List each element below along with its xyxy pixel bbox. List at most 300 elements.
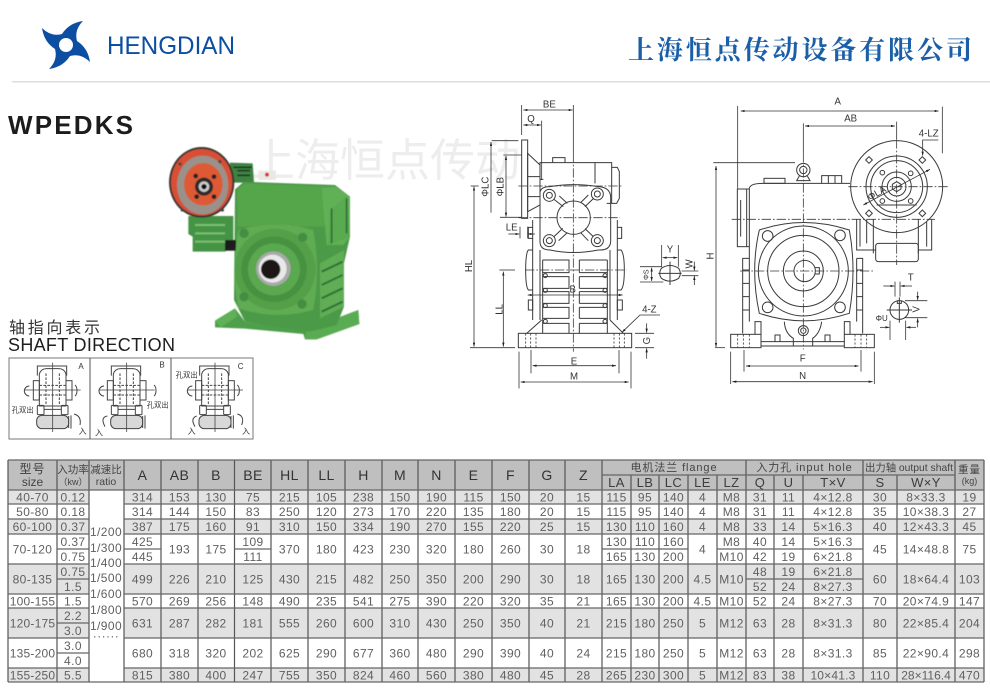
row 70-120: 14 (781, 535, 796, 549)
company name: 上海恒点传动设备有限公司 (628, 35, 972, 65)
table header row: （kw） (58, 477, 88, 487)
row 100-155: 148 (242, 594, 264, 608)
row 155-250: 815 (132, 668, 153, 682)
motor flange block (188, 216, 233, 252)
row 50-80: 11 (782, 505, 795, 519)
brand name: HENGDIAN (107, 32, 235, 60)
row 135-200: 24 (576, 646, 591, 660)
row 60-100: 25 (540, 520, 554, 534)
input shaft section: ΦU (876, 314, 888, 323)
row 120-175: 250 (663, 616, 684, 630)
row 80-135: 200 (663, 572, 684, 586)
row 70-120: 5×16.3 (813, 535, 853, 549)
row 70-120: 14×48.8 (903, 542, 949, 556)
row 100-155: 35 (540, 594, 554, 608)
shaft direction diagrams (9, 358, 253, 439)
row 80-135: 1.5 (64, 580, 82, 594)
row 80-135: 499 (132, 572, 153, 586)
specification table (8, 460, 984, 682)
row 40-70: 19 (962, 490, 977, 504)
row 100-155: 269 (169, 594, 190, 608)
model title: WPEDKS (8, 110, 133, 140)
table header row: LC (665, 475, 682, 490)
front plate (235, 225, 317, 315)
dimensions (705, 96, 942, 384)
table header row: 减速比 (90, 463, 122, 476)
row 80-135: 80-135 (13, 572, 52, 586)
row 155-250: 460 (389, 668, 411, 682)
shaft direction heading: 轴指向表示 (9, 319, 100, 337)
row 40-70: 150 (389, 490, 411, 504)
row 40-70: 4 (699, 490, 706, 504)
reduction ratio column: 1/500 (90, 571, 122, 585)
shaft direction heading (8, 319, 175, 355)
row 100-155 (10, 594, 980, 608)
table header row: size (22, 475, 43, 489)
dimensions: M (570, 371, 578, 382)
row 100-155: 490 (279, 594, 300, 608)
row 80-135: 130 (634, 572, 656, 586)
row 100-155: 1.5 (64, 594, 82, 608)
row 120-175: 2.2 (64, 609, 82, 623)
row 155-250: 28×116.4 (901, 668, 951, 682)
table header row: S (875, 475, 885, 490)
product photo: worm gearbox (169, 147, 359, 339)
row 50-80: 20 (540, 505, 554, 519)
shaft option A (12, 362, 87, 436)
dimensions: 4-Z (642, 305, 657, 316)
table header row: LA (608, 475, 625, 490)
table header row: H (358, 467, 369, 483)
row 120-175: 21 (576, 616, 591, 630)
row 40-70: 15 (576, 490, 591, 504)
row 70-120: 370 (279, 542, 300, 556)
row 50-80: 50-80 (16, 505, 49, 519)
row 40-70: M8 (723, 490, 740, 504)
table header row: (kg) (962, 476, 977, 486)
row 50-80: 140 (663, 505, 684, 519)
table header row: ratio (96, 476, 116, 488)
row 100-155: 4.5 (694, 594, 711, 608)
row 100-155: 220 (463, 594, 484, 608)
row 100-155: 275 (389, 594, 411, 608)
row 100-155: 256 (205, 594, 227, 608)
table header row: Z (579, 467, 588, 483)
row 120-175: 63 (753, 616, 767, 630)
row 120-175: 120-175 (10, 616, 55, 630)
row 80-135: 8×27.3 (813, 580, 853, 594)
row 80-135: 0.75 (61, 565, 85, 579)
row 80-135: 350 (426, 572, 447, 586)
row 120-175: M12 (719, 616, 744, 630)
reduction ratio column: 1/400 (90, 556, 122, 570)
table grid (8, 460, 984, 682)
row 120-175: 260 (316, 616, 337, 630)
row 60-100: 33 (753, 520, 767, 534)
row 50-80: 250 (279, 505, 300, 519)
table header row: LZ (724, 475, 739, 490)
row 60-100: 91 (246, 520, 260, 534)
shaft option B: B (159, 361, 165, 370)
dimensions: 4-LZ (919, 129, 939, 140)
row 60-100: 110 (635, 520, 655, 534)
row 120-175 (10, 609, 980, 638)
gearbox housing (234, 182, 350, 332)
row 40-70: 95 (638, 490, 652, 504)
row 155-250: 38 (781, 668, 796, 682)
row 135-200: 298 (959, 646, 980, 660)
ribs and feet (731, 258, 874, 348)
row 155-250: 265 (606, 668, 627, 682)
table header row: N (431, 467, 442, 483)
dimensions: B (569, 285, 576, 296)
row 80-135: 24 (781, 580, 796, 594)
row 40-70: 314 (132, 490, 153, 504)
row 155-250: 380 (463, 668, 484, 682)
dimensions: F (800, 354, 806, 365)
row 120-175: 631 (132, 616, 153, 630)
shaft option B: 孔双出 (147, 400, 169, 409)
shaft key section (640, 244, 698, 285)
shaft option A: 孔双出 (12, 405, 34, 414)
row 50-80: 4 (699, 505, 706, 519)
reduction ratio column: 1/300 (90, 541, 122, 555)
row 100-155: 20×74.9 (903, 594, 949, 608)
row 100-155: 200 (663, 594, 684, 608)
dimensions: E (571, 357, 578, 368)
row 60-100: 150 (316, 520, 337, 534)
row 40-70: 238 (353, 490, 374, 504)
row 40-70: 0.12 (61, 490, 85, 504)
row 120-175: 28 (781, 616, 796, 630)
row 60-100: 190 (389, 520, 411, 534)
row 70-120: 320 (426, 542, 447, 556)
row 135-200: 390 (500, 646, 521, 660)
row 155-250: 10×41.3 (810, 668, 856, 682)
row 70-120: 110 (635, 535, 655, 549)
row 40-70: 30 (873, 490, 887, 504)
row 70-120 (13, 535, 977, 564)
row 50-80 (16, 505, 977, 519)
row 120-175: 5 (699, 616, 706, 630)
shaft option B: 入 (95, 428, 103, 437)
table header row: 出力轴 output shaft (865, 461, 953, 474)
row 70-120: 200 (663, 550, 684, 564)
base plate (518, 320, 632, 348)
row 60-100: 14 (781, 520, 796, 534)
ribbed lower body (526, 220, 624, 333)
row 80-135: 200 (463, 572, 484, 586)
row 155-250: 560 (426, 668, 447, 682)
shaft option C: 孔双出 (176, 370, 198, 379)
shaft key section: W (685, 259, 696, 269)
row 100-155: 390 (426, 594, 447, 608)
dimensions: HL (464, 259, 475, 272)
shaft option A: A (78, 362, 84, 371)
shaft option C: 入 (242, 427, 250, 436)
row 135-200: 250 (663, 646, 684, 660)
reduction ratio column: 1/900 (90, 619, 122, 633)
row 60-100: 175 (169, 520, 190, 534)
reduction ratio column: ······ (93, 629, 119, 643)
row 135-200: 202 (242, 646, 264, 660)
row 135-200: 625 (279, 646, 300, 660)
shaft key section: ΦS (642, 269, 651, 280)
row 135-200: 318 (169, 646, 190, 660)
row 155-250: 45 (540, 668, 554, 682)
row 70-120: 130 (634, 550, 656, 564)
table header row: 入力孔 input hole (756, 461, 853, 474)
row 155-250: 380 (169, 668, 190, 682)
row 60-100: 310 (279, 520, 300, 534)
input shaft section: V (912, 306, 923, 313)
row 70-120: 18 (576, 542, 591, 556)
row 50-80: 135 (463, 505, 484, 519)
table header row: U (784, 475, 793, 490)
row 80-135: 18 (576, 572, 591, 586)
row 80-135: 250 (389, 572, 411, 586)
row 80-135: 165 (606, 572, 627, 586)
header divider (12, 81, 990, 82)
red motor flange (169, 147, 234, 218)
row 100-155: 165 (606, 594, 627, 608)
row 120-175: 80 (873, 616, 887, 630)
row 60-100: 160 (663, 520, 684, 534)
row 100-155: 70 (873, 594, 887, 608)
row 60-100: 270 (426, 520, 447, 534)
centre lines (518, 153, 627, 352)
shaft option C: 入 (188, 427, 196, 436)
row 120-175: 22×85.4 (903, 616, 949, 630)
row 135-200: 135-200 (10, 646, 55, 660)
row 135-200: 5 (699, 646, 706, 660)
table header row: E (469, 467, 478, 483)
row 40-70: 140 (663, 490, 684, 504)
row 40-70: 153 (169, 490, 190, 504)
row 50-80: 15 (576, 505, 591, 519)
row 100-155: 320 (500, 594, 521, 608)
row 60-100 (13, 520, 977, 534)
row 50-80: 31 (753, 505, 767, 519)
shaft option A: 入 (79, 427, 87, 436)
row 60-100: 155 (463, 520, 484, 534)
row 80-135: 290 (500, 572, 521, 586)
row 80-135: 482 (353, 572, 374, 586)
row 100-155: 541 (353, 594, 374, 608)
row 60-100: 220 (500, 520, 521, 534)
side view technical drawing (464, 99, 698, 388)
row 70-120: 423 (353, 542, 374, 556)
row 120-175: 3.0 (64, 624, 82, 638)
row 80-135: 226 (169, 572, 190, 586)
row 135-200 (10, 639, 980, 668)
table header row (19, 460, 981, 490)
table header row: HL (280, 467, 299, 483)
table header row: LL (318, 467, 335, 483)
row 50-80: 170 (389, 505, 411, 519)
row 155-250: 5.5 (64, 668, 82, 682)
flange and housing outline (522, 140, 619, 218)
row 40-70: 105 (316, 490, 337, 504)
row 50-80: 35 (873, 505, 887, 519)
row 135-200: 180 (634, 646, 656, 660)
row 155-250: 110 (870, 668, 890, 682)
reduction ratio column: 1/800 (90, 603, 122, 617)
row 100-155: 147 (959, 594, 980, 608)
housing outline (737, 163, 850, 322)
row 155-250: 755 (279, 668, 300, 682)
row 155-250: 400 (205, 668, 227, 682)
row 100-155: M10 (719, 594, 744, 608)
row 70-120: 130 (606, 535, 627, 549)
right side panel and ribs (322, 187, 350, 245)
row 50-80: 95 (638, 505, 652, 519)
row 60-100: 60-100 (13, 520, 52, 534)
row 120-175: 430 (426, 616, 447, 630)
row 100-155: 235 (316, 594, 337, 608)
table header row: 电机法兰 flange (631, 460, 717, 474)
row 155-250: 480 (500, 668, 521, 682)
row 80-135: 125 (242, 572, 264, 586)
row 60-100: M8 (723, 520, 740, 534)
row 80-135: 6×21.8 (813, 565, 853, 579)
row 80-135: M10 (719, 572, 744, 586)
row 40-70: 115 (606, 490, 627, 504)
gearbox base (215, 308, 359, 339)
logo: Hengdian blades (42, 21, 90, 69)
row 70-120: 111 (243, 550, 263, 564)
row 135-200: 320 (205, 646, 227, 660)
row 70-120: 45 (873, 542, 887, 556)
row 135-200: 3.0 (64, 639, 82, 653)
row 70-120: 180 (316, 542, 337, 556)
dimensions: G (642, 337, 653, 344)
row 100-155: 52 (753, 594, 767, 608)
row 135-200: 4.0 (64, 654, 82, 668)
upper rear box (230, 163, 254, 183)
row 70-120: 42 (753, 550, 767, 564)
row 50-80: 180 (500, 505, 521, 519)
row 135-200: 680 (132, 646, 153, 660)
shaft option C: C (238, 362, 244, 371)
table header row: 入功率 (57, 463, 89, 476)
row 120-175: 282 (205, 616, 227, 630)
row 70-120: 260 (500, 542, 521, 556)
row 155-250: 300 (663, 668, 684, 682)
row 50-80: 83 (246, 505, 260, 519)
row 60-100: 15 (576, 520, 591, 534)
row 50-80: 120 (316, 505, 337, 519)
table header row: B (211, 467, 221, 483)
row 80-135: 215 (316, 572, 337, 586)
row 80-135: 48 (753, 565, 767, 579)
row 60-100: 12×43.3 (903, 520, 949, 534)
row 80-135: 60 (873, 572, 887, 586)
row 120-175: 181 (242, 616, 264, 630)
row 135-200: 63 (753, 646, 767, 660)
row 155-250: 155-250 (10, 668, 55, 682)
input shaft section (876, 273, 927, 340)
row 155-250: 230 (634, 668, 656, 682)
square flange face (540, 185, 611, 252)
row 70-120: M10 (719, 550, 744, 564)
row 100-155: 570 (132, 594, 153, 608)
row 135-200: 40 (540, 646, 554, 660)
row 135-200: 8×31.3 (813, 646, 853, 660)
row 120-175: 40 (540, 616, 554, 630)
row 70-120: 75 (962, 542, 977, 556)
row 135-200: 290 (463, 646, 484, 660)
row 60-100: 0.37 (61, 520, 85, 534)
row 135-200: 28 (781, 646, 796, 660)
row 40-70: 11 (782, 490, 795, 504)
row 155-250: 5 (699, 668, 706, 682)
reduction ratio column: 1/200 (90, 525, 122, 539)
row 135-200: 677 (353, 646, 374, 660)
shaft option C (176, 362, 250, 436)
row 80-135: 4.5 (694, 572, 711, 586)
table header row: F (506, 467, 515, 483)
row 70-120: 165 (606, 550, 627, 564)
row 120-175: 250 (463, 616, 484, 630)
row 120-175: 555 (279, 616, 300, 630)
table header row: W×Y (911, 475, 941, 490)
row 70-120: 4 (699, 542, 706, 556)
row 70-120: 6×21.8 (813, 550, 853, 564)
row 70-120: 19 (781, 550, 796, 564)
row 40-70: 31 (753, 490, 767, 504)
row 120-175: 287 (169, 616, 190, 630)
row 40-70 (16, 490, 977, 504)
row 135-200: 360 (389, 646, 411, 660)
row 70-120: 445 (132, 550, 153, 564)
centre lines (732, 139, 948, 349)
row 60-100: 5×16.3 (813, 520, 853, 534)
row 80-135: 210 (205, 572, 227, 586)
row 80-135: 430 (279, 572, 300, 586)
row 80-135 (13, 565, 980, 594)
row 120-175: 215 (606, 616, 627, 630)
dimensions: N (799, 371, 806, 382)
table header row: AB (170, 467, 189, 483)
row 40-70: 130 (205, 490, 227, 504)
row 50-80: 27 (962, 505, 977, 519)
row 60-100: 334 (353, 520, 374, 534)
dimensions: ΦLA (866, 184, 889, 203)
motor flange (851, 141, 943, 262)
row 70-120: 175 (205, 542, 227, 556)
row 135-200: 22×90.4 (903, 646, 949, 660)
row 155-250: 824 (353, 668, 374, 682)
row 70-120: 30 (540, 542, 554, 556)
row 70-120: 193 (169, 542, 190, 556)
row 60-100: 45 (962, 520, 977, 534)
row 40-70: 190 (426, 490, 447, 504)
dimensions: AB (844, 114, 857, 125)
row 120-175: 8×31.3 (813, 616, 853, 630)
row 70-120: M8 (723, 535, 740, 549)
row 155-250: 470 (959, 668, 980, 682)
table header row: 重量 (958, 463, 981, 476)
row 135-200: M12 (719, 646, 744, 660)
row 50-80: 4×12.8 (813, 505, 853, 519)
row 40-70: 115 (463, 490, 484, 504)
row 155-250: M12 (719, 668, 744, 682)
row 100-155: 24 (781, 594, 796, 608)
row 100-155: 8×27.3 (813, 594, 853, 608)
watermark: 上海恒点传动 (250, 135, 520, 186)
row 40-70: 4×12.8 (813, 490, 853, 504)
